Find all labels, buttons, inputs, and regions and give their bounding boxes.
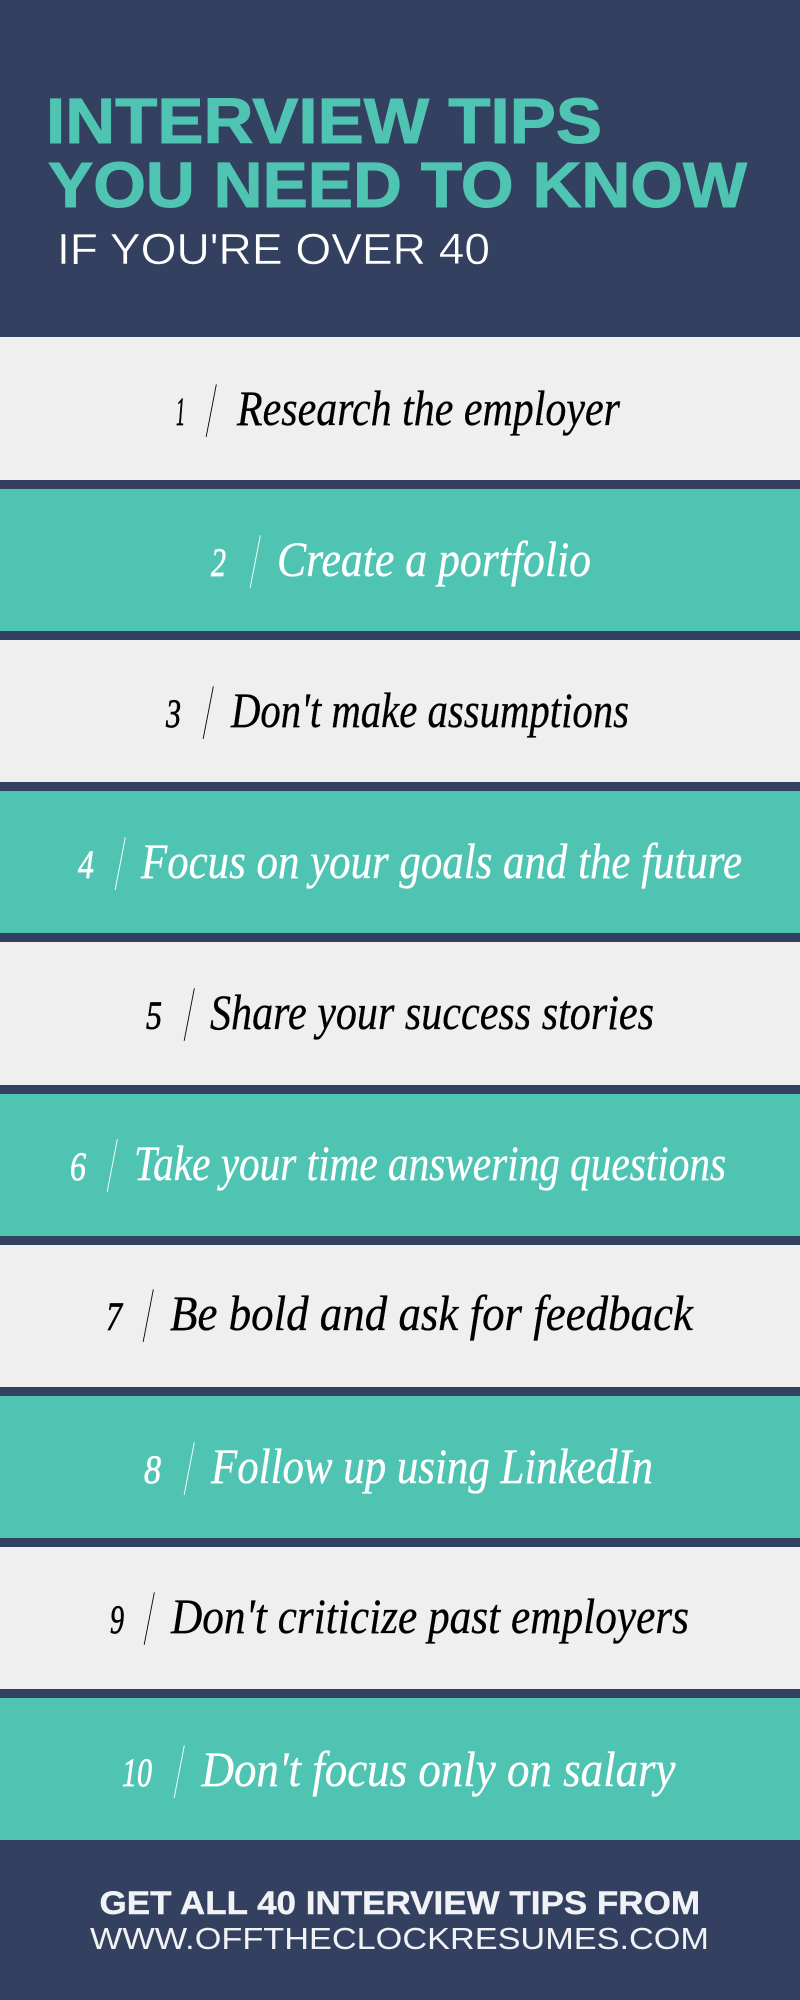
tip 4 panel: |: [114, 828, 129, 890]
tip 9 panel: [0, 1547, 800, 1689]
title: INTERVIEW TIPS: [46, 85, 602, 157]
tip 1 panel: |: [205, 375, 220, 437]
tip 9 panel: |: [143, 1583, 158, 1645]
tip 10 panel: |: [173, 1736, 188, 1798]
tip 7 panel: 7: [106, 1294, 124, 1339]
footer website: WWW.OFFTHECLOCKRESUMES.COM: [90, 1921, 709, 1956]
tip 1 panel: Research the employer: [236, 380, 620, 436]
tip 5 panel: 5: [146, 993, 162, 1038]
title: YOU NEED TO KNOW: [48, 149, 748, 221]
tip 6 panel: |: [106, 1130, 121, 1192]
tip 5 panel: |: [183, 979, 198, 1041]
tip 4 panel: [0, 791, 800, 933]
tip 10 panel: 10: [122, 1750, 152, 1795]
tip 6 panel: 6: [70, 1144, 86, 1189]
tip 8 panel: 8: [144, 1447, 161, 1492]
tip 9 panel: Don't criticize past employers: [170, 1588, 689, 1644]
tip 5 panel: Share your success stories: [210, 984, 654, 1040]
tip 8 panel: Follow up using LinkedIn: [210, 1438, 653, 1494]
tip 2 panel: 2: [211, 540, 226, 585]
tip 1 panel: 1: [176, 389, 185, 434]
tip 10 panel: [0, 1698, 800, 1840]
tip 8 panel: [0, 1396, 800, 1538]
subtitle: IF YOU'RE OVER 40: [57, 225, 490, 274]
tip 7 panel: |: [142, 1280, 157, 1342]
tip 2 panel: [0, 489, 800, 631]
footer call to action: GET ALL 40 INTERVIEW TIPS FROM: [100, 1885, 700, 1921]
tip 4 panel: 4: [78, 842, 94, 887]
tip 7 panel: Be bold and ask for feedback: [170, 1285, 694, 1341]
tip 9 panel: 9: [110, 1597, 124, 1642]
tip 8 panel: |: [183, 1433, 198, 1495]
tip 3 panel: |: [202, 677, 217, 739]
tip 1 panel: [0, 337, 800, 480]
header panel: [0, 0, 800, 337]
tip 5 panel: [0, 942, 800, 1085]
tip 3 panel: Don't make assumptions: [230, 682, 629, 738]
footer panel: [0, 1840, 800, 2000]
tip 6 panel: [0, 1094, 800, 1236]
tip 7 panel: [0, 1245, 800, 1387]
tip 10 panel: Don't focus only on salary: [201, 1741, 676, 1797]
tip 2 panel: Create a portfolio: [277, 531, 591, 587]
tip 3 panel: [0, 640, 800, 782]
tip 2 panel: |: [249, 526, 264, 588]
tip 3 panel: 3: [165, 691, 181, 736]
title: [46, 85, 748, 221]
